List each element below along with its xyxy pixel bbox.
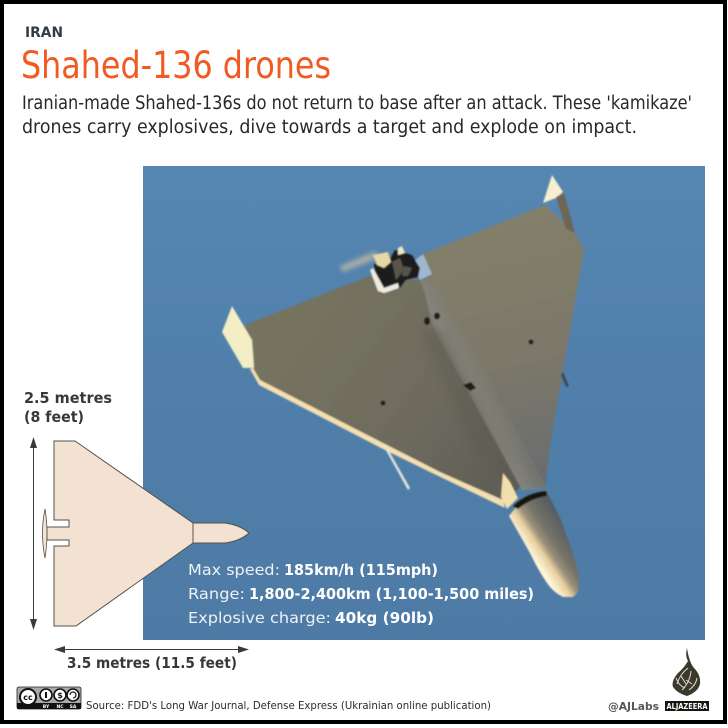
creative commons badge: SA [70,704,77,710]
nose cone [193,523,249,543]
Al Jazeera logo [665,648,709,711]
description text: drones carry explosives, dive towards a target and explode on impact. [22,117,637,138]
height label: 2.5 metres [24,389,112,407]
description text [22,93,692,138]
drone specifications: Range: [188,585,245,603]
photo sky background [143,166,705,640]
black band [513,491,547,509]
width label: 3.5 metres (11.5 feet) [67,654,237,672]
height label [24,389,112,426]
nose [509,491,579,597]
source line: Source: FDD's Long War Journal, Defense Express (Ukrainian online publication) [86,699,491,712]
notch sky gap [413,254,432,280]
drone specifications: 40kg (90lb) [335,609,434,627]
logo wordmark [665,701,709,711]
tail fin [42,509,47,558]
fuselage ridge [422,280,548,490]
title: Shahed-136 drones [21,44,331,87]
creative commons badge: $ [57,691,63,700]
right fin [543,175,563,203]
left fin [222,306,254,368]
left wing [245,275,525,505]
creative commons badge: BY [43,704,50,710]
height label: (8 feet) [24,408,84,426]
drone specifications: Explosive charge: [188,609,331,627]
propeller blur [340,251,378,272]
drone specifications: Max speed: [188,561,280,579]
engine [370,246,420,293]
drone specifications: 1,800-2,400km (1,100-1,500 miles) [249,585,534,603]
right wing [420,205,584,488]
credit handle: @AJLabs [608,700,659,713]
width arrow [54,646,249,653]
creative commons badge [17,687,81,710]
antenna [383,444,410,490]
creative commons badge: cc [23,693,33,702]
drone in flight [222,175,584,597]
height arrow [30,437,37,630]
logo drop mark [673,648,700,696]
lit trailing edge [250,368,505,508]
drone specifications: 185km/h (115mph) [284,561,438,579]
panel: drone photograph [143,166,705,640]
Al Jazeera logo: ALJAZEERA [666,702,708,711]
drone silhouette diagram [42,441,249,626]
shaded wing patch [420,330,515,490]
region label: IRAN [25,25,63,41]
surface marks [380,312,534,406]
creative commons badge: NC [56,704,64,710]
small rear fin [501,473,518,509]
drone specifications [188,561,534,627]
